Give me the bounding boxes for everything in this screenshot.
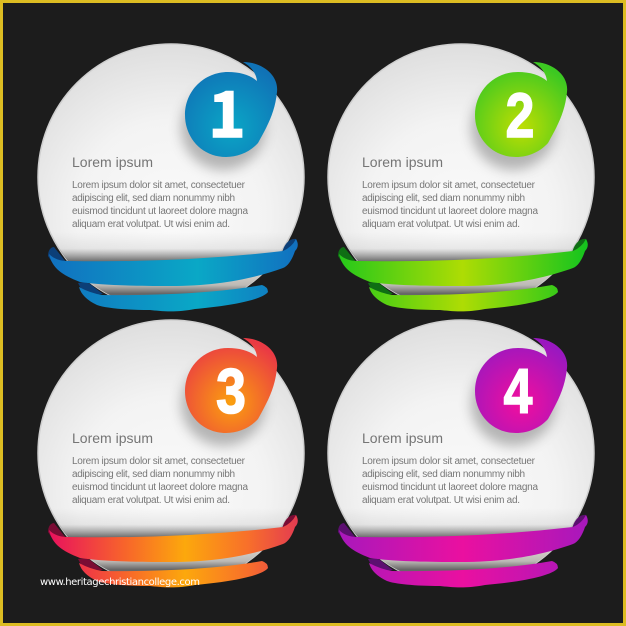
badge 1 xyxy=(181,62,277,170)
sphere 2 xyxy=(327,43,595,296)
body text 4: euismod tincidunt ut laoreet dolore magna xyxy=(362,482,538,493)
body text 3: Lorem ipsum dolor sit amet, consectetuer xyxy=(72,456,246,467)
body text 3 xyxy=(72,456,248,506)
body text 3: adipiscing elit, sed diam nonummy nibh xyxy=(72,469,235,480)
number 2: 2 xyxy=(506,81,534,151)
body text 2: euismod tincidunt ut laoreet dolore magna xyxy=(362,206,538,217)
sphere 3 xyxy=(37,319,305,572)
body text 4 xyxy=(362,456,538,506)
number 3: 3 xyxy=(216,357,246,427)
badge 2 xyxy=(471,62,567,170)
heading 1: Lorem ipsum xyxy=(72,154,153,170)
ribbon 4 xyxy=(338,515,588,587)
body text 3: euismod tincidunt ut laoreet dolore magna xyxy=(72,482,248,493)
body text 2 xyxy=(362,180,538,230)
body text 4: adipiscing elit, sed diam nonummy nibh xyxy=(362,469,525,480)
body text 3: aliquam erat volutpat. Ut wisi enim ad. xyxy=(72,495,230,506)
body text 4: aliquam erat volutpat. Ut wisi enim ad. xyxy=(362,495,520,506)
body text 1: Lorem ipsum dolor sit amet, consectetuer xyxy=(72,180,246,191)
badge 3 xyxy=(181,338,277,446)
heading 3: Lorem ipsum xyxy=(72,430,153,446)
sphere 4 xyxy=(327,319,595,572)
body text 4: Lorem ipsum dolor sit amet, consectetuer xyxy=(362,456,536,467)
panel: step 2 xyxy=(320,44,602,315)
body text 2: Lorem ipsum dolor sit amet, consectetuer xyxy=(362,180,536,191)
heading 4: Lorem ipsum xyxy=(362,430,443,446)
sphere 1 xyxy=(37,43,305,296)
ribbon 1 xyxy=(48,239,298,311)
ribbon 3 xyxy=(48,515,298,587)
panel: step 3 xyxy=(30,320,312,591)
heading 2: Lorem ipsum xyxy=(362,154,443,170)
badge 4 xyxy=(471,338,567,446)
ribbon 2 xyxy=(338,239,588,311)
body text 1: aliquam erat volutpat. Ut wisi enim ad. xyxy=(72,219,230,230)
body text 1: adipiscing elit, sed diam nonummy nibh xyxy=(72,193,235,204)
panel: step 1 xyxy=(30,44,312,315)
panel: step 4 xyxy=(320,320,602,591)
number 4: 4 xyxy=(504,357,532,427)
number 1: 1 xyxy=(208,65,246,156)
body text 2: aliquam erat volutpat. Ut wisi enim ad. xyxy=(362,219,520,230)
body text 1: euismod tincidunt ut laoreet dolore magna xyxy=(72,206,248,217)
watermark: www.heritagechristiancollege.com xyxy=(40,577,200,588)
body text 1 xyxy=(72,180,248,230)
body text 2: adipiscing elit, sed diam nonummy nibh xyxy=(362,193,525,204)
